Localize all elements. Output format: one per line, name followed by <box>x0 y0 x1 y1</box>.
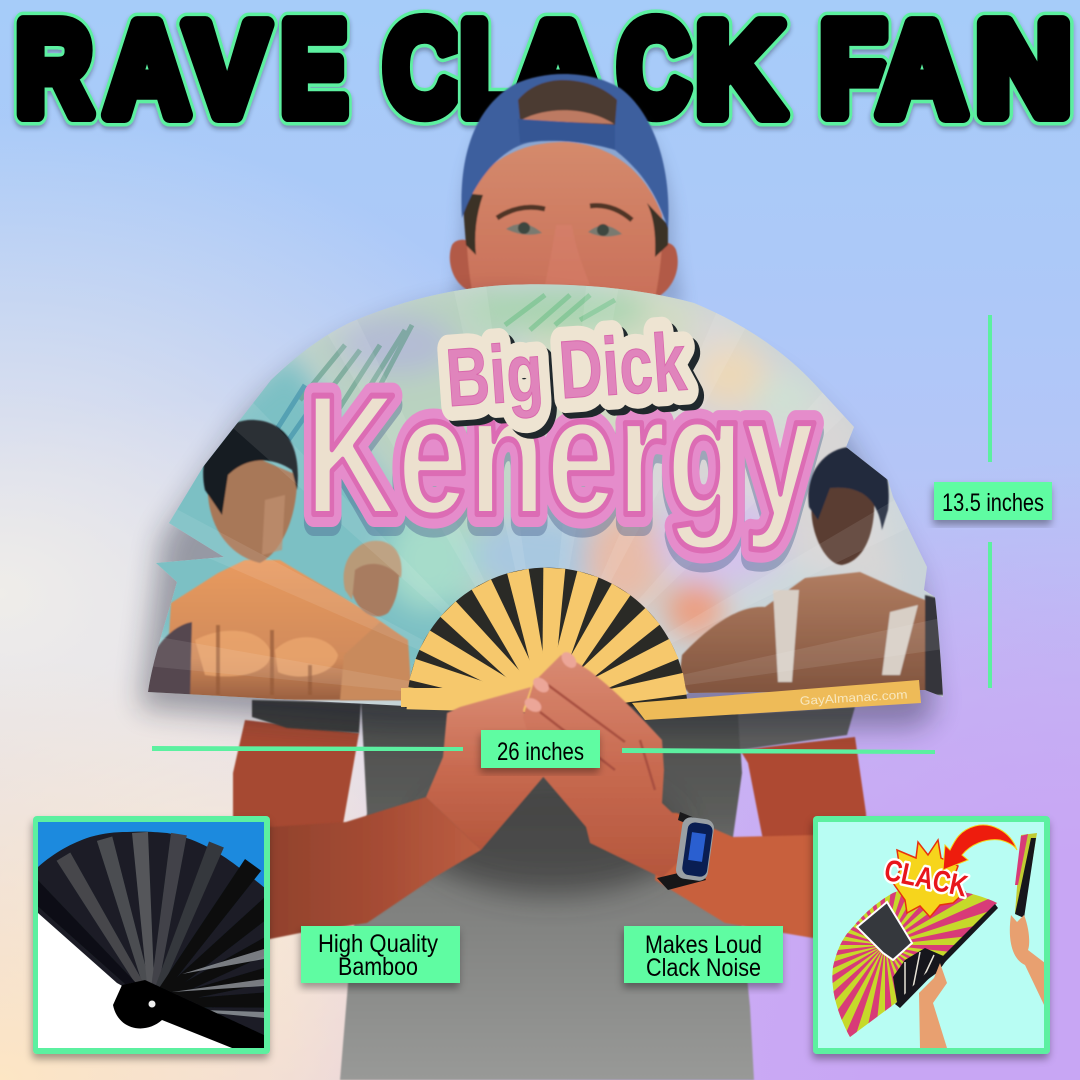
closed fan <box>1015 833 1037 917</box>
title: V <box>186 0 268 143</box>
fan text: Kenergy: Kenergy <box>305 368 815 560</box>
left man <box>146 420 410 700</box>
right hand <box>523 655 680 878</box>
title: A <box>878 0 966 143</box>
person <box>233 74 868 1080</box>
label: Makes Loud Clack Noise: Clack Noise <box>646 954 761 982</box>
fan <box>125 284 949 744</box>
palm fronds <box>270 295 615 445</box>
label: High Quality Bamboo <box>301 926 460 983</box>
blond man <box>340 541 412 700</box>
left forearm <box>232 797 481 945</box>
hub and handle <box>113 980 264 1048</box>
label: 26 inches <box>481 730 600 768</box>
fan text: Big Dick: Big Dick <box>443 317 689 424</box>
blue fabric <box>38 822 264 888</box>
title: A <box>878 0 966 143</box>
title <box>16 0 1071 143</box>
CLACK word: CLACK <box>881 854 971 904</box>
watch <box>657 812 715 890</box>
reversed cap <box>461 74 668 228</box>
ears <box>450 240 476 292</box>
fan text: Kenergy: Kenergy <box>305 359 815 551</box>
black fan frame <box>38 832 265 1048</box>
upper arms <box>233 720 868 880</box>
title: A <box>105 0 189 143</box>
fan text: Kenergy: Kenergy <box>305 359 815 551</box>
inset: bamboo close-up photo <box>27 816 274 1064</box>
title: K <box>696 0 784 143</box>
fan leaf artwork <box>148 284 943 706</box>
fan text: Big Dick: Big Dick <box>443 317 689 424</box>
nails <box>522 649 579 715</box>
label: Makes Loud Clack Noise: Makes Loud <box>645 931 762 959</box>
title: A <box>105 0 189 143</box>
label: High Quality Bamboo: High Quality <box>318 930 438 958</box>
hair sides <box>462 193 483 255</box>
right man <box>679 447 945 695</box>
inset: clack demonstration <box>810 816 1050 1054</box>
bamboo ribs <box>405 568 688 719</box>
title: K <box>696 0 784 143</box>
right handle with brand text: GayAlmanac.com <box>799 687 908 708</box>
head <box>450 74 684 320</box>
right forearm <box>655 812 868 938</box>
title: V <box>186 0 268 143</box>
label: Makes Loud Clack Noise <box>624 926 783 983</box>
right handle with brand text <box>632 680 921 720</box>
pleat texture <box>153 294 940 691</box>
finger detail <box>540 685 655 790</box>
opened fan with sun rays <box>832 891 998 1037</box>
title: A <box>510 0 606 143</box>
fan shadow <box>140 301 935 728</box>
burst <box>893 840 965 917</box>
label: 26 inches: 26 inches <box>497 738 584 766</box>
red arrow <box>943 825 1017 870</box>
sleeves <box>252 700 361 733</box>
left hand <box>426 687 545 850</box>
arms and hands <box>232 649 868 945</box>
label: 13.5 inches <box>934 482 1052 520</box>
fan text: Big Dick: Big Dick <box>449 322 695 430</box>
hands <box>919 963 947 1048</box>
label: 13.5 inches: 13.5 inches <box>942 489 1044 517</box>
dimension lines <box>152 315 992 754</box>
face <box>467 142 662 320</box>
left handle <box>401 688 560 707</box>
eyebrows and eyes <box>497 207 545 218</box>
head shadow <box>454 82 684 306</box>
title: A <box>510 0 606 143</box>
grey t-shirt <box>252 700 855 1080</box>
label: High Quality Bamboo: Bamboo <box>338 953 418 981</box>
